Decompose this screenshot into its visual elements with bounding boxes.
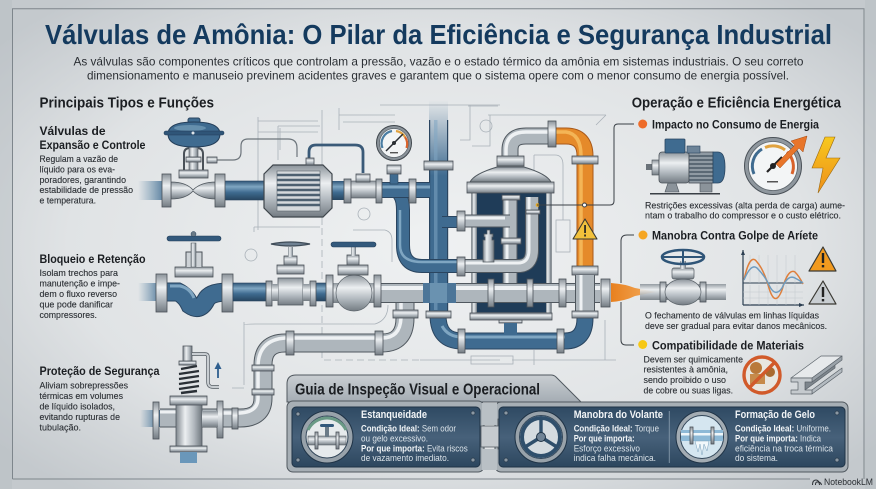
block: expansion and control valves: Válvulas de <box>40 124 106 138</box>
block: water hammer: O fechamento de válvulas em linhas líquidas <box>645 310 819 322</box>
card text: ice: eficiência na troca térmica <box>735 444 834 454</box>
card text: ice: Por que importa: Indica <box>735 434 822 444</box>
block: material compatibility: resistentes à amônia, <box>644 364 728 376</box>
vessel body <box>472 190 551 313</box>
card text: ice <box>735 409 834 463</box>
card text: tightness: de vazamento imediato. <box>361 453 449 463</box>
pressure gauge <box>376 126 412 184</box>
icon: steel I-beam <box>791 356 842 394</box>
card text: handwheel: Condição Ideal: Torque <box>574 424 659 434</box>
isolation valve line <box>138 274 327 312</box>
vessel dome and base <box>467 156 554 334</box>
gate valve 2 <box>266 242 316 306</box>
main silver header <box>377 161 610 353</box>
icon: grey warning triangle <box>809 281 836 304</box>
card text: tightness <box>361 409 468 463</box>
block: material compatibility: Devem ser quimicamente <box>644 354 743 366</box>
globe valve 3 <box>326 242 381 311</box>
blue vertical header and loop <box>380 100 585 341</box>
block: expansion and control valves <box>40 124 146 206</box>
card: handwheel and ice <box>499 407 845 467</box>
card text: ice: do sistema. <box>735 453 778 463</box>
icon: orange warning triangle <box>809 247 836 271</box>
heading: operation and efficiency: Operação e Eficiência Energética <box>632 96 842 112</box>
callout leader lines <box>537 124 634 345</box>
blueprint background lines <box>232 105 616 388</box>
icon: handwheel <box>515 411 567 463</box>
block: isolation and check: Bloqueio e Retenção <box>40 252 146 266</box>
icon: lightning bolt <box>812 137 840 193</box>
silver vessel internals <box>462 195 540 285</box>
block: material compatibility: Compatibilidade de Materiais <box>652 338 804 352</box>
card text: tightness: Estanqueidade <box>361 409 427 421</box>
block: isolation and check: compressores. <box>40 310 97 321</box>
card text: handwheel: Manobra do Volante <box>574 409 663 421</box>
motor and silver tee <box>264 145 382 217</box>
introduction text: As válvulas são componentes críticos que controlam a pressão, vazão e o estado térmico da amônia em sistemas industriais. O seu correto <box>74 56 804 68</box>
block: safety protection: Proteção de Segurança <box>40 364 160 378</box>
block: safety protection: evitando rupturas de <box>40 412 120 423</box>
guide frames and arrow connector <box>287 401 848 472</box>
lower silver return pipe <box>200 303 418 438</box>
icon: gate valve with handwheel <box>640 250 726 305</box>
orange jet from header <box>611 283 656 302</box>
card text: ice: Formação de Gelo <box>735 409 815 421</box>
block: expansion and control valves: estabilidade de pressão <box>40 185 133 196</box>
block: isolation and check <box>40 252 146 321</box>
guide header tab <box>287 375 581 402</box>
block: energy impact <box>638 118 845 220</box>
pipe network <box>138 100 634 463</box>
block: safety protection: tubulação. <box>40 422 81 434</box>
block: expansion and control valves: poradores, garantindo <box>40 175 126 186</box>
block: water hammer: Manobra Contra Golpe de Aríete <box>652 228 818 242</box>
icon: electric motor <box>646 139 725 194</box>
card text: handwheel: Esforço excessivo <box>574 444 640 454</box>
block: isolation and check: Isolam trechos para <box>40 268 119 279</box>
card text: tightness: Por que importa: Evita riscos <box>361 444 468 454</box>
block: water hammer <box>638 228 827 332</box>
block: energy impact: Impacto no Consumo de Energia <box>652 118 819 132</box>
block: expansion and control valves: Expansão e Controle <box>40 138 146 152</box>
chart: pressure oscillation <box>741 250 804 307</box>
icon: frost on pipe <box>676 411 728 463</box>
card: tightness <box>292 407 480 467</box>
introduction text: dimensionamento e manuseio previnem acidentes graves e garantem que o sistema opere com o menor consumo de energia possível. <box>87 70 789 82</box>
block: energy impact: ntam o trabalho do compressor e o custo elétrico. <box>645 210 841 220</box>
warning sign on orange pipe <box>573 219 597 239</box>
block: isolation and check: que pode danificar <box>40 300 114 310</box>
block: safety protection <box>40 364 160 434</box>
control valve line <box>138 139 348 207</box>
block: material compatibility: sendo proibido o uso <box>644 375 726 386</box>
icon: no copper <box>744 357 780 393</box>
block: expansion and control valves: líquido para os eva- <box>40 164 115 176</box>
isolation handwheel 1 <box>167 232 221 277</box>
arrow: relief direction <box>214 362 222 378</box>
block: safety protection: Aliviam sobrepressões <box>40 380 128 392</box>
control valve actuator <box>164 118 224 147</box>
card text: ice: Condição Ideal: Uniforme. <box>735 424 831 434</box>
right column <box>611 96 845 396</box>
block: material compatibility <box>638 338 804 396</box>
card text: tightness: Condição Ideal: Sem odor <box>361 424 456 434</box>
block: expansion and control valves: e temperatura. <box>40 196 96 206</box>
card text: handwheel: indica falha mecânica. <box>574 453 656 463</box>
block: expansion and control valves: Regulam a vazão de <box>40 154 118 165</box>
icon: leak check valve <box>301 411 353 463</box>
card text: handwheel: Por que importa: <box>574 434 635 444</box>
inspection guide panel <box>287 375 848 472</box>
block: safety protection: térmicas em volumes <box>40 391 123 402</box>
card text: tightness: ou gelo excessivo. <box>361 434 428 444</box>
block: water hammer: deve ser gradual para evitar danos mecânicos. <box>645 321 827 332</box>
top silver and orange outlet <box>506 121 598 275</box>
safety relief valve <box>140 346 219 463</box>
block: isolation and check: dem o fluxo reverso <box>40 289 117 300</box>
icon: efficiency gauge with rising arrow <box>744 136 807 194</box>
block: isolation and check: manutenção e impe- <box>40 278 120 290</box>
block: material compatibility: de cobre ou suas ligas. <box>644 386 733 396</box>
guide heading: Guia de Inspeção Visual e Operacional <box>295 382 540 398</box>
heading: main types: Principais Tipos e Funções <box>40 96 214 112</box>
block: energy impact: Restrições excessivas (alta perda de carga) aume- <box>645 200 845 210</box>
block: safety protection: de líquido isolados, <box>40 402 115 412</box>
left column headings and descriptions <box>40 96 214 434</box>
card text: handwheel <box>574 409 663 463</box>
introduction text <box>74 56 804 82</box>
